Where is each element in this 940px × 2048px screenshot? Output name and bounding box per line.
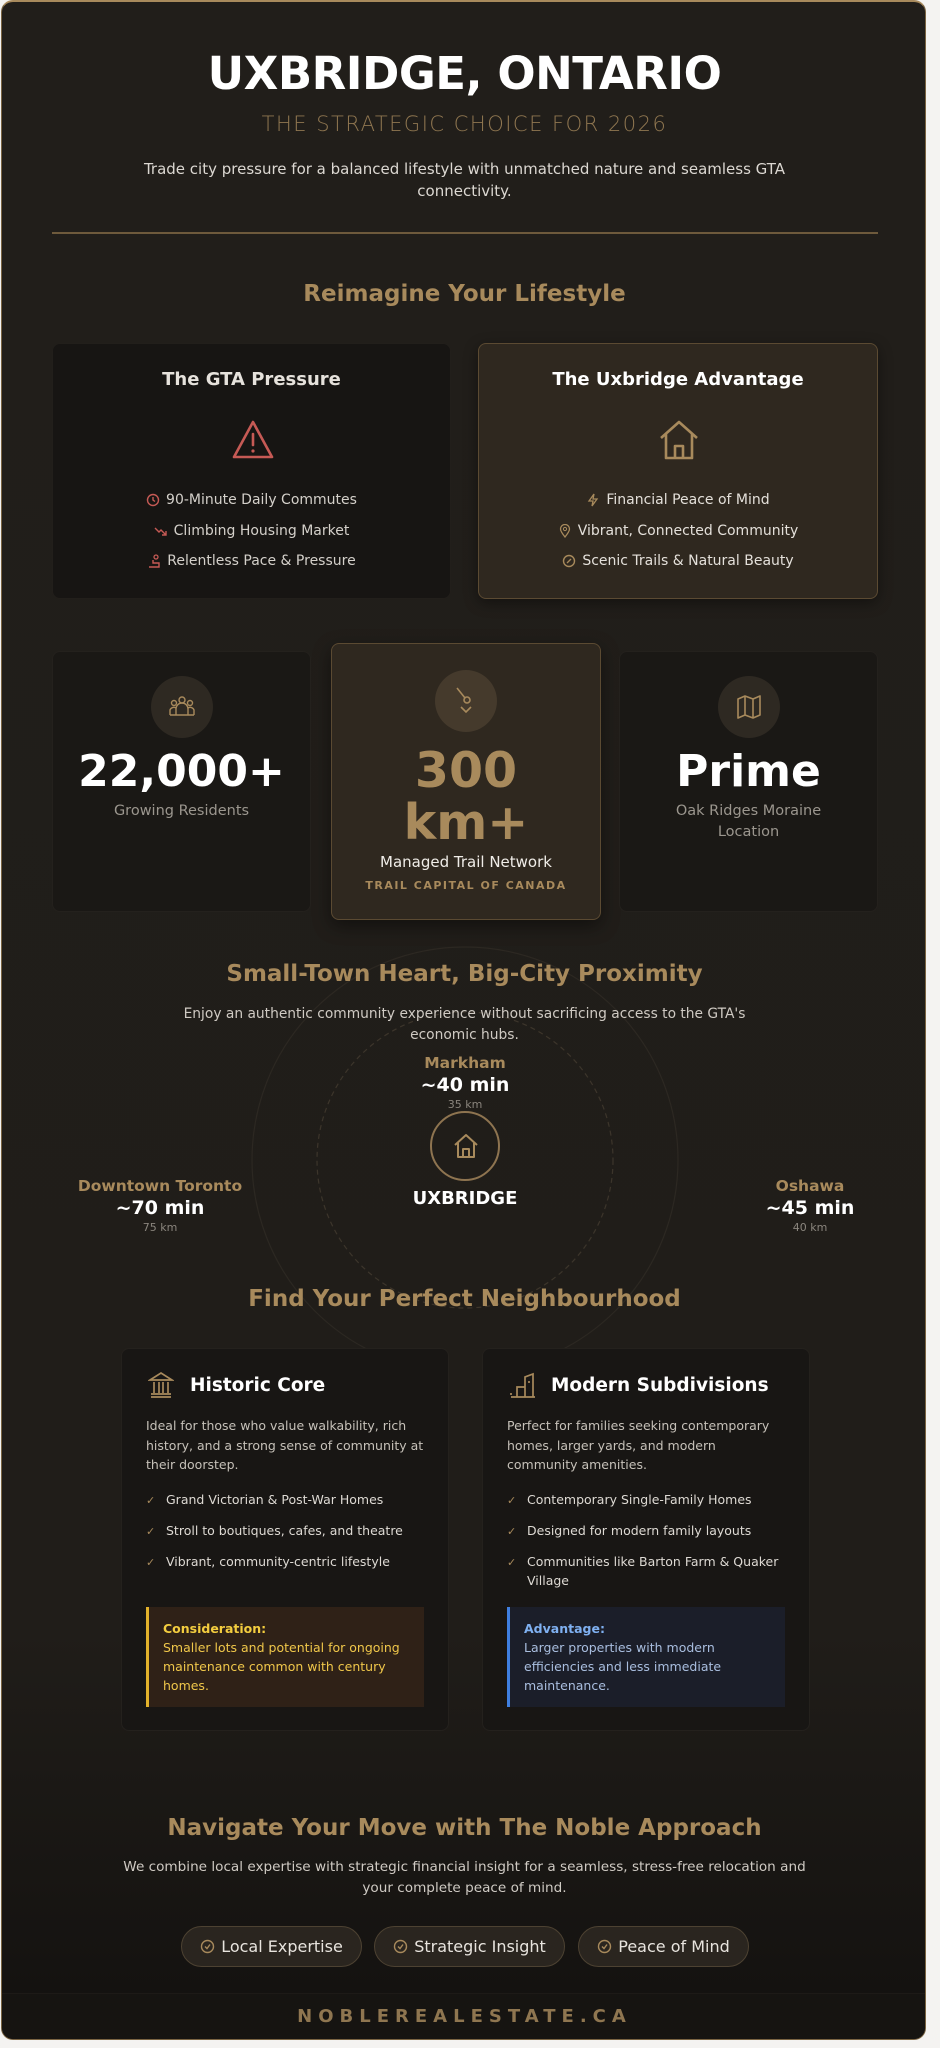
stat: residents: [52, 651, 311, 912]
label: [676, 803, 821, 840]
list: Financial Peace of Mind: [606, 492, 770, 508]
location: Oshawa: Oshawa: [776, 1177, 844, 1195]
location: Markham: Markham: [424, 1054, 506, 1072]
sublabel: TRAIL CAPITAL OF CANADA: [365, 879, 567, 892]
description: Enjoy an authentic community experience without sacrificing access to the GTA's economic hubs.: [184, 1006, 745, 1043]
description: homes, larger yards, and modern: [507, 1438, 716, 1452]
icon: home center: [430, 1111, 500, 1181]
callout: advantage: [507, 1607, 785, 1707]
card: historic core: Vibrant, community-centric lifestyle: [166, 1554, 390, 1569]
callout: advantage: Larger properties with modern efficiencies and less immediate maintenance.: [524, 1640, 721, 1693]
title: UXBRIDGE, ONTARIO: [208, 47, 721, 100]
label: Oak Ridges Moraine: [676, 803, 821, 819]
panel: Uxbridge advantage: Vibrant, Connected Community: [578, 523, 798, 539]
pill: local expertise: [181, 1926, 362, 1967]
icon: buildings: [510, 1372, 535, 1398]
description: Ideal for those who value walkability, rich history, and a strong sense of community at their doorstep.: [146, 1418, 423, 1472]
panel: Uxbridge advantage: [478, 343, 878, 599]
pill: strategic insight: [374, 1926, 565, 1967]
description: community amenities.: [507, 1457, 647, 1472]
list: 90-Minute Daily Commutes: [166, 492, 357, 508]
location: Downtown Toronto: [78, 1177, 242, 1234]
icon: trail: [435, 670, 497, 732]
location: Downtown Toronto: ~70 min: [116, 1197, 204, 1219]
tagline: Trade city pressure for a balanced lifestyle with unmatched nature and seamless GTA connectivity.: [144, 160, 785, 200]
card: historic core: Stroll to boutiques, cafes, and theatre: [166, 1523, 403, 1538]
callout: consideration: Smaller lots and potential for ongoing maintenance common with century homes.: [163, 1640, 400, 1693]
number: 22,000+: [78, 746, 285, 797]
footer: NOBLEREALESTATE.CA: [297, 2006, 632, 2027]
heading: neighbourhood: Find Your Perfect Neighbourhood: [248, 1286, 681, 1312]
subtitle: THE STRATEGIC CHOICE FOR 2026: [262, 112, 667, 136]
icon: map: [718, 676, 780, 738]
bullet list: ✓: [507, 1494, 516, 1507]
callout: consideration: [146, 1607, 424, 1707]
stat: location: [619, 651, 878, 912]
bullet list: ✓: [146, 1494, 155, 1507]
icon: house: [660, 420, 698, 460]
location: Markham: [421, 1054, 509, 1111]
heading: reimagine: Reimagine Your Lifestyle: [303, 281, 626, 307]
callout: consideration: Consideration:: [163, 1621, 266, 1636]
panel title: The Uxbridge Advantage: [552, 369, 804, 390]
bullet list: Grand Victorian & Post-War Homes: [166, 1492, 383, 1507]
location: Markham: 35 km: [448, 1098, 482, 1111]
description: [507, 1418, 769, 1472]
proximity map rings: [252, 946, 678, 1348]
pill: local expertise: Local Expertise: [221, 1937, 343, 1956]
icon: people: [150, 676, 212, 738]
bullet list: Contemporary Single-Family Homes: [527, 1492, 752, 1507]
stat: trails (featured): [331, 643, 601, 920]
location: Downtown Toronto: Downtown Toronto: [78, 1177, 242, 1195]
panel title: The GTA Pressure: [162, 369, 341, 390]
footer: [2, 1993, 927, 2042]
pill: peace of mind: [578, 1926, 749, 1967]
panel: Uxbridge advantage: Scenic Trails & Natural Beauty: [582, 553, 794, 569]
card: modern subdivisions: ✓: [507, 1525, 516, 1538]
pill: peace of mind: Peace of Mind: [618, 1937, 730, 1956]
location: Oshawa: ~45 min: [766, 1197, 854, 1219]
card: historic core: ✓: [146, 1525, 155, 1538]
icon: warning: [232, 420, 274, 458]
location: Oshawa: [766, 1177, 854, 1234]
number: 300: [415, 742, 517, 799]
description: We combine local expertise with strategic financial insight for a seamless, stress-free relocation and your complete peace of mind.: [123, 1859, 806, 1896]
number: Prime: [676, 746, 821, 797]
callout: advantage: Advantage:: [524, 1621, 605, 1636]
pill: strategic insight: Strategic Insight: [414, 1937, 546, 1956]
label: Location: [718, 824, 779, 840]
card: historic core: [121, 1348, 449, 1731]
panel: GTA pressure: [52, 343, 451, 599]
heading: noble approach: Navigate Your Move with The Noble Approach: [167, 1815, 762, 1841]
card: modern subdivisions: Communities like Barton Farm & Quaker Village: [527, 1554, 778, 1588]
location: Markham: ~40 min: [421, 1074, 509, 1096]
label: Growing Residents: [114, 803, 249, 819]
card: modern subdivisions: ✓: [507, 1556, 516, 1569]
number: km+: [404, 794, 528, 851]
heading: Historic Core: [190, 1375, 325, 1396]
panel: GTA pressure: Climbing Housing Market: [174, 523, 349, 539]
location: Oshawa: 40 km: [793, 1221, 827, 1234]
panel: GTA pressure: Relentless Pace & Pressure: [167, 553, 356, 569]
number: [404, 742, 528, 851]
icon: columns: [148, 1372, 174, 1398]
description: Perfect for families seeking contemporary: [507, 1418, 769, 1433]
heading: proximity: Small-Town Heart, Big-City Proximity: [226, 961, 703, 987]
location: Downtown Toronto: 75 km: [143, 1221, 177, 1234]
label: Managed Trail Network: [380, 853, 552, 871]
card: modern subdivisions: [482, 1348, 810, 1731]
card: historic core: ✓: [146, 1556, 155, 1569]
card: modern subdivisions: Designed for modern family layouts: [527, 1523, 751, 1538]
heading: Modern Subdivisions: [551, 1375, 769, 1396]
label: Uxbridge: UXBRIDGE: [413, 1188, 517, 1209]
